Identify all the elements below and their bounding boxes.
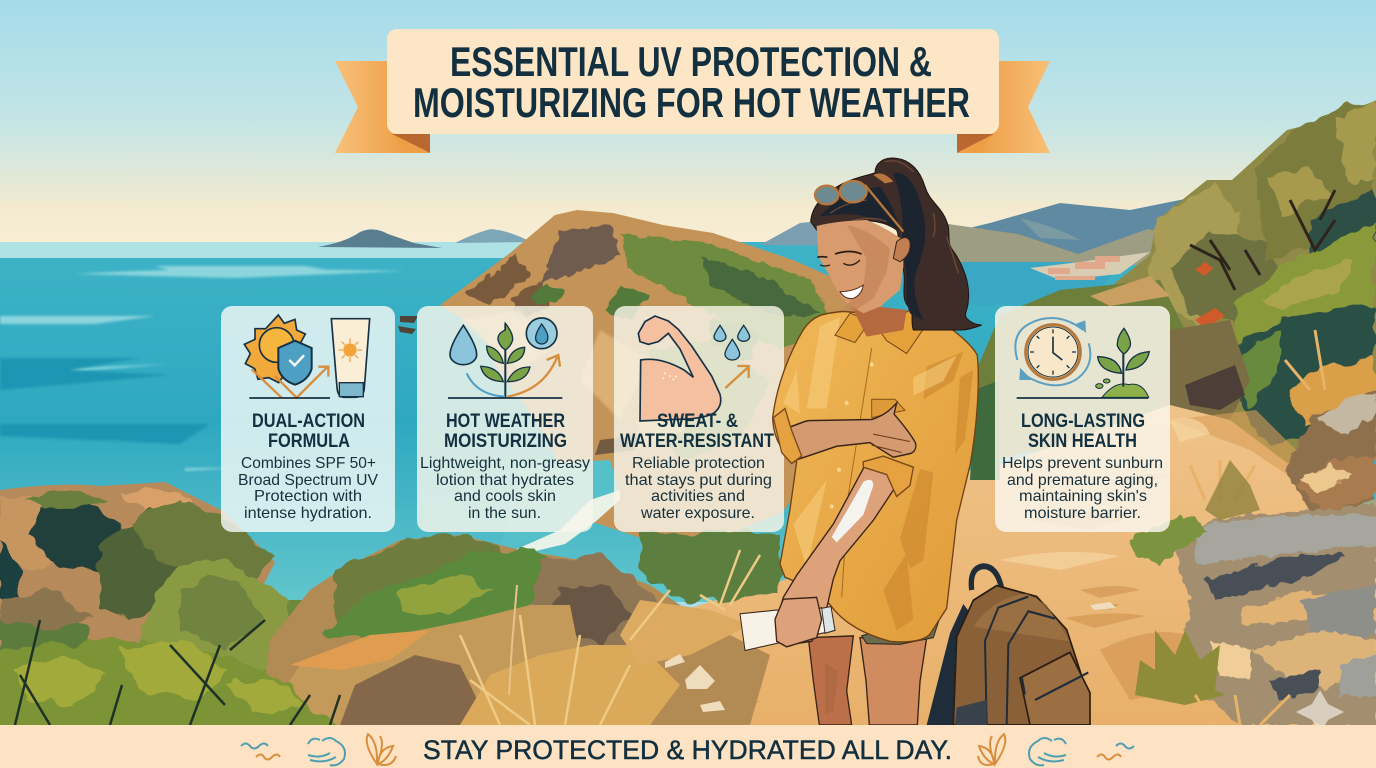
heading: MOISTURIZING: [444, 430, 567, 452]
description: and premature aging,: [1007, 472, 1158, 489]
lower arm with lotion: [775, 465, 900, 645]
panel: dual-action formula: [221, 306, 395, 532]
grass tufts right: [1135, 630, 1225, 705]
description: water exposure.: [640, 505, 755, 522]
far hills on the right: [940, 198, 1210, 268]
hair: [811, 158, 982, 330]
title text: [413, 38, 970, 126]
description: [420, 455, 590, 522]
title ribbon: [335, 29, 1050, 153]
description: and cools skin: [454, 488, 556, 505]
foreground grasses: [260, 605, 650, 725]
face: [817, 220, 903, 313]
cuff: [863, 456, 913, 497]
heading: HOT WEATHER: [446, 410, 565, 432]
heading: LONG-LASTING: [1021, 410, 1145, 432]
description: activities and: [651, 488, 745, 505]
heading: [252, 410, 365, 452]
heading: SWEAT- &: [657, 410, 738, 432]
heading: [444, 410, 567, 452]
heading: DUAL-ACTION: [252, 410, 365, 432]
heading: FORMULA: [268, 430, 350, 452]
panel: long-lasting skin health: [995, 306, 1170, 532]
description: Broad Spectrum UV: [238, 472, 378, 489]
legs: [808, 636, 927, 725]
description: Helps prevent sunburn: [1002, 455, 1163, 472]
sand ground: [640, 405, 1376, 725]
forearm crossing: [785, 403, 916, 460]
description: Reliable protection: [632, 455, 765, 472]
description: in the sun.: [468, 505, 541, 522]
shirt: [773, 310, 978, 642]
headland: [440, 210, 883, 552]
woman applying lotion: [740, 158, 982, 725]
description: moisture barrier.: [1024, 505, 1141, 522]
icon: sun, shield and sunscreen tube: [244, 315, 370, 398]
heading: SKIN HEALTH: [1028, 430, 1137, 452]
sunglasses: [815, 181, 903, 232]
inlet water: [500, 460, 620, 550]
heading: WATER-RESISTANT: [620, 430, 774, 452]
description: maintaining skin's: [1019, 488, 1147, 505]
distant islands: [318, 229, 442, 248]
hand holding tube: [775, 597, 822, 647]
middle shrubs: [260, 535, 770, 725]
icon: clock and seedling: [1015, 318, 1149, 398]
lower hillside with shrubs: [970, 280, 1200, 460]
lotion tube: [740, 608, 835, 651]
heading: [620, 410, 774, 452]
description: intense hydration.: [244, 505, 372, 522]
title text: MOISTURIZING FOR HOT WEATHER: [413, 79, 970, 126]
icon: left waves and leaf: [241, 734, 396, 765]
description: [625, 455, 772, 522]
description: [238, 455, 378, 522]
icon: right leaf and waves: [978, 734, 1134, 765]
footer band: [0, 725, 1376, 768]
description: Protection with: [254, 488, 362, 505]
panel: sweat and water resistant: [614, 306, 784, 532]
collar: [835, 306, 927, 354]
panel: hot weather moisturizing: [417, 306, 593, 532]
shorts: [862, 612, 942, 644]
description: that stays put during: [625, 472, 772, 489]
head with ponytail and sunglasses: [811, 158, 982, 337]
icon: flexed arm and water drops: [638, 316, 750, 421]
right-side hillside: [1050, 90, 1376, 490]
icon: water drop, plant and arrow: [448, 318, 562, 398]
footer tagline: STAY PROTECTED & HYDRATED ALL DAY.: [423, 735, 952, 765]
body, legs and arms: [740, 306, 978, 725]
title text: ESSENTIAL UV PROTECTION &: [450, 38, 932, 85]
backpack: [927, 566, 1090, 725]
description: lotion that hydrates: [436, 472, 574, 489]
heading: [1021, 410, 1145, 452]
description: [1002, 455, 1163, 522]
right rocks: [1285, 390, 1376, 520]
description: Lightweight, non-greasy: [420, 455, 590, 472]
left shore and bushes: [0, 482, 275, 712]
description: Combines SPF 50+: [241, 455, 376, 472]
